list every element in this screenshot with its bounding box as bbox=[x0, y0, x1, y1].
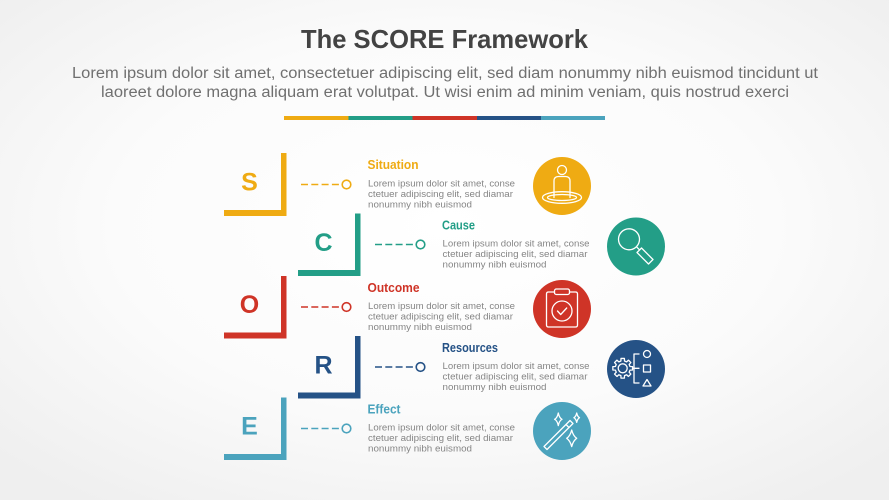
description Outcome: Lorem ipsum dolor sit amet, conse bbox=[368, 301, 515, 312]
bracket O bbox=[224, 276, 286, 338]
subtitle text block: laoreet dolore magna aliquam erat volutpat. Ut wisi enim ad minim veniam, quis nostrud exerci bbox=[101, 84, 789, 101]
bracket R bbox=[298, 336, 360, 398]
description Cause bbox=[442, 238, 590, 270]
description Outcome: ctetuer adipiscing elit, sed diamar bbox=[368, 312, 514, 322]
description Effect: Lorem ipsum dolor sit amet, conse bbox=[368, 422, 515, 434]
row: C Cause bbox=[298, 214, 665, 276]
description Cause: Lorem ipsum dolor sit amet, conse bbox=[442, 238, 590, 250]
icon: magnifying glass bbox=[607, 218, 665, 276]
heading Outcome: Outcome bbox=[368, 280, 420, 295]
description Situation bbox=[368, 178, 515, 210]
description Resources: ctetuer adipiscing elit, sed diamar bbox=[442, 372, 588, 382]
multicolour divider bar bbox=[284, 116, 605, 120]
description Effect bbox=[368, 422, 515, 454]
icon: clipboard check bbox=[533, 280, 591, 338]
letter O: O bbox=[240, 291, 259, 319]
bracket S bbox=[224, 153, 286, 216]
connector C bbox=[375, 240, 425, 249]
connector O bbox=[301, 303, 351, 311]
bracket E bbox=[224, 398, 286, 460]
connector S bbox=[301, 180, 351, 189]
icon: person on target bbox=[533, 157, 591, 215]
row: S Situation bbox=[224, 153, 591, 216]
description Situation: nonummy nibh euismod bbox=[368, 200, 472, 210]
description Outcome bbox=[368, 301, 515, 333]
description Situation: ctetuer adipiscing elit, sed diamar bbox=[368, 189, 514, 200]
title: The SCORE Framework bbox=[301, 24, 589, 54]
row: O Outcome bbox=[224, 276, 591, 338]
bracket C bbox=[298, 214, 360, 276]
heading Cause: Cause bbox=[442, 218, 475, 232]
heading Situation: Situation bbox=[368, 157, 418, 172]
letter R: R bbox=[314, 352, 333, 380]
description Effect: nonummy nibh euismod bbox=[368, 444, 472, 454]
letter C: C bbox=[314, 229, 333, 257]
icon: magic wand bbox=[533, 402, 591, 460]
heading Resources: Resources bbox=[442, 340, 498, 355]
connector R bbox=[375, 363, 425, 371]
description Situation: Lorem ipsum dolor sit amet, conse bbox=[368, 178, 515, 190]
description Resources: nonummy nibh euismod bbox=[442, 382, 546, 393]
subtitle text block bbox=[72, 65, 819, 101]
row: R Resources bbox=[298, 336, 665, 398]
description Resources: Lorem ipsum dolor sit amet, conse bbox=[442, 361, 590, 372]
description Effect: ctetuer adipiscing elit, sed diamar bbox=[368, 433, 514, 444]
heading Effect: Effect bbox=[368, 402, 401, 416]
connector E bbox=[301, 424, 351, 433]
row: E Effect bbox=[224, 398, 591, 460]
icon: gear and shapes bbox=[607, 340, 665, 398]
description Cause: ctetuer adipiscing elit, sed diamar bbox=[442, 249, 588, 260]
letter E: E bbox=[241, 412, 258, 440]
description Outcome: nonummy nibh euismod bbox=[368, 322, 472, 333]
description Cause: nonummy nibh euismod bbox=[442, 260, 546, 270]
subtitle text block: Lorem ipsum dolor sit amet, consectetuer adipiscing elit, sed diam nonummy nibh euismod tincidunt ut bbox=[72, 65, 819, 82]
letter S: S bbox=[241, 168, 258, 196]
description Resources bbox=[442, 361, 590, 393]
